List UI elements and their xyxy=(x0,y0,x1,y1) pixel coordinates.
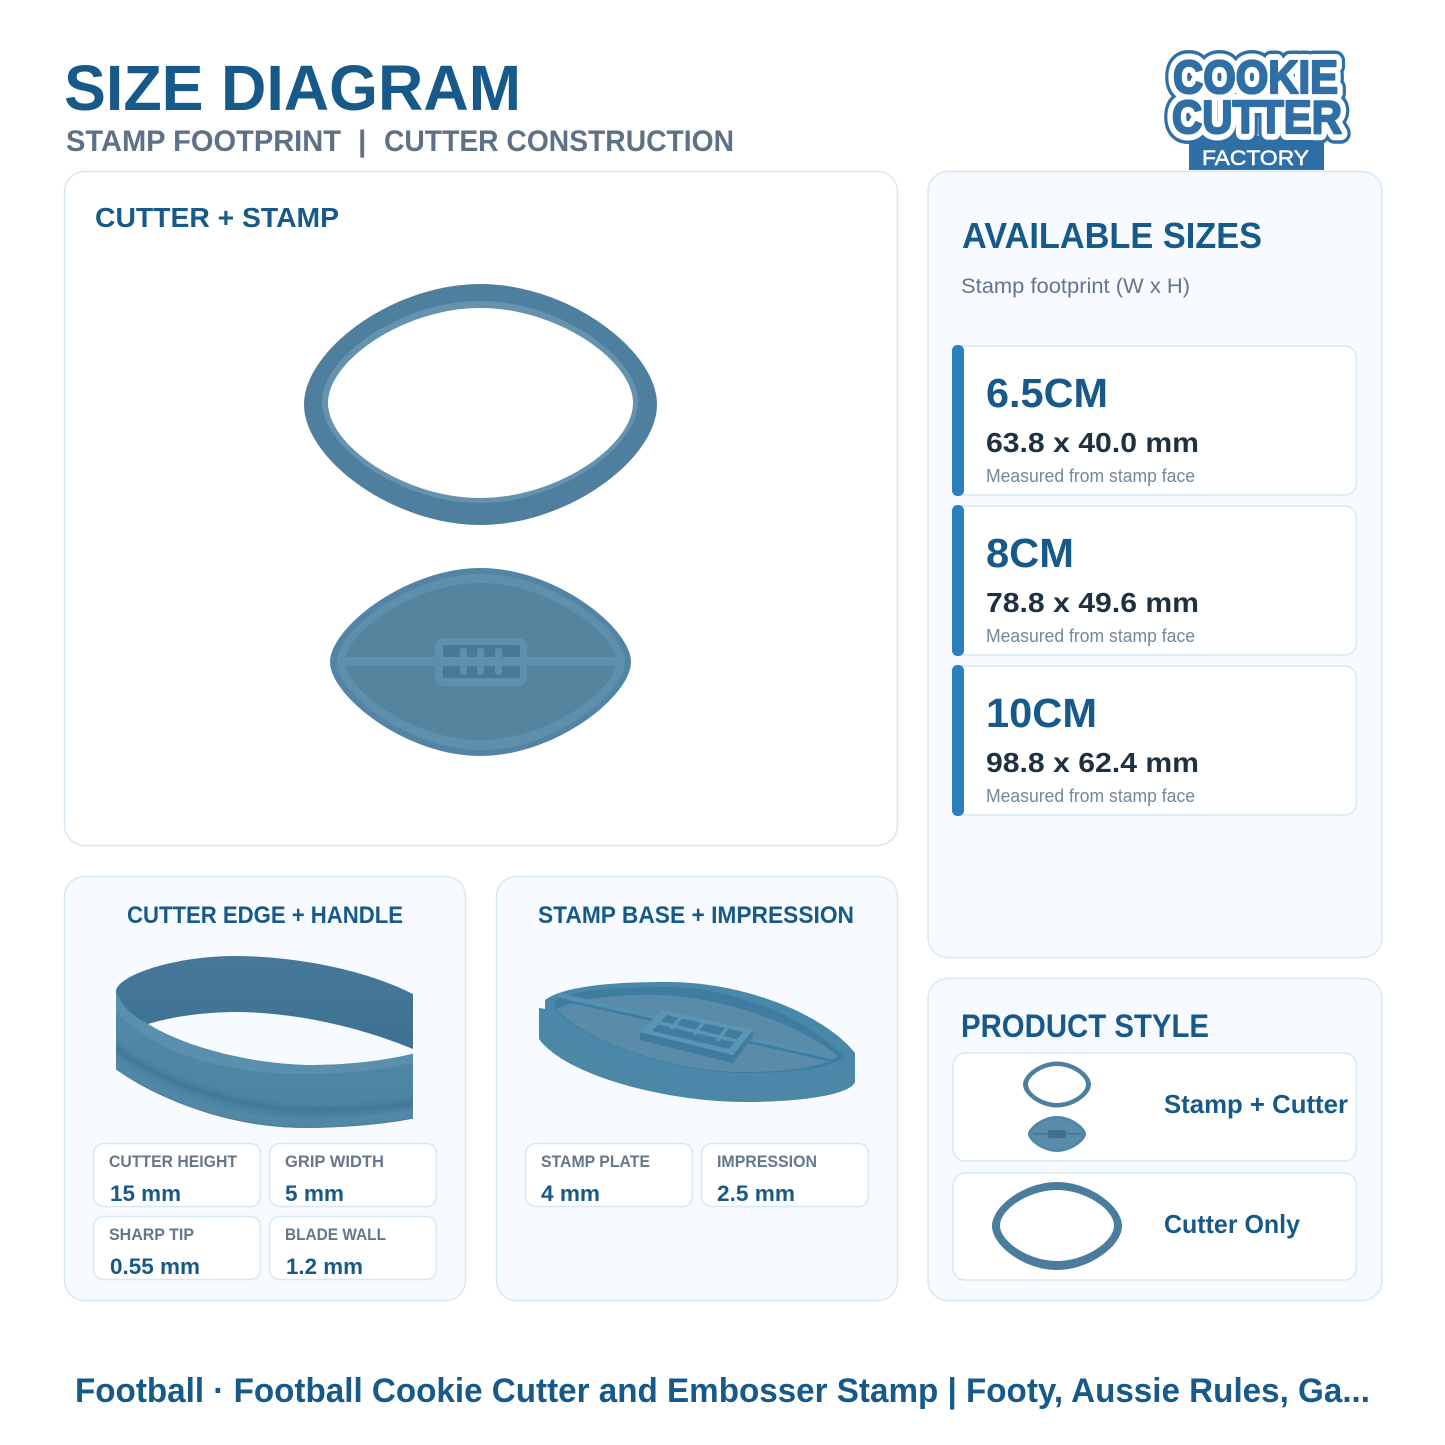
size card: 10cm xyxy=(952,665,1356,816)
panel: cutter + stamp xyxy=(64,172,898,846)
option: stamp + cutter: Stamp + Cutter xyxy=(1164,1089,1348,1119)
spec: grip width: 5 mm xyxy=(285,1181,344,1206)
logo: Cookie Cutter Factory: CUTTER xyxy=(1172,91,1342,143)
size card: 8cm: 78.8 x 49.6 mm xyxy=(986,587,1199,618)
stamp 3D render xyxy=(539,982,855,1102)
logo: Cookie Cutter Factory: COOKIE xyxy=(1173,51,1338,103)
panel: product style xyxy=(928,978,1382,1300)
size card: 8cm xyxy=(952,505,1356,656)
panel: cutter edge + handle xyxy=(64,876,466,1300)
logo: Cookie Cutter Factory xyxy=(1172,51,1342,170)
size card: 6.5cm: Measured from stamp face xyxy=(986,465,1195,486)
spec: grip width xyxy=(270,1144,436,1206)
footer product title: Football · Football Cookie Cutter and Embosser Stamp | Footy, Aussie Rules, Ga... xyxy=(75,1372,1370,1410)
spec: impression: 2.5 mm xyxy=(717,1181,795,1206)
cutter 3D render xyxy=(114,956,420,1128)
subtitle xyxy=(66,125,734,158)
subtitle: CUTTER CONSTRUCTION xyxy=(384,125,734,158)
spec: cutter height: CUTTER HEIGHT xyxy=(109,1152,238,1171)
spec: blade wall: BLADE WALL xyxy=(285,1225,386,1244)
cutter top view xyxy=(304,284,657,525)
logo: Cookie Cutter Factory: CUTTER xyxy=(1172,91,1342,143)
spec: blade wall: 1.2 mm xyxy=(286,1254,363,1279)
spec: impression xyxy=(702,1144,868,1206)
heading: cutter edge + handle: CUTTER EDGE + HANDLE xyxy=(127,902,403,929)
spec: cutter height xyxy=(94,1144,260,1206)
spec: grip width: GRIP WIDTH xyxy=(285,1152,384,1171)
logo: Cookie Cutter Factory: FACTORY xyxy=(1202,147,1309,170)
logo: Cookie Cutter Factory: CUTTER xyxy=(1172,91,1342,143)
heading: stamp base + impression: STAMP BASE + IMPRESSION xyxy=(538,902,854,929)
spec: impression: IMPRESSION xyxy=(717,1152,817,1171)
subtitle: STAMP FOOTPRINT xyxy=(66,125,341,158)
spec: stamp plate: 4 mm xyxy=(541,1181,600,1206)
spec: sharp tip: SHARP TIP xyxy=(109,1225,194,1244)
size card: 10cm: 10CM xyxy=(986,690,1097,736)
option: cutter only: Cutter Only xyxy=(1164,1209,1301,1239)
spec: stamp plate: STAMP PLATE xyxy=(541,1152,650,1171)
size card: 10cm: Measured from stamp face xyxy=(986,785,1195,806)
stamp top view xyxy=(330,568,631,756)
title: SIZE DIAGRAM xyxy=(64,52,521,124)
logo: Cookie Cutter Factory: COOKIE xyxy=(1173,51,1338,103)
spec: sharp tip xyxy=(94,1216,260,1280)
panel: stamp base + impression xyxy=(496,876,898,1300)
size card: 10cm: 98.8 x 62.4 mm xyxy=(986,747,1199,778)
spec: stamp plate xyxy=(526,1144,692,1206)
logo: Cookie Cutter Factory: COOKIE xyxy=(1173,51,1338,103)
subtitle: | xyxy=(358,125,366,158)
heading: available sizes: AVAILABLE SIZES xyxy=(962,215,1262,256)
size card: 6.5cm: 6.5CM xyxy=(986,370,1108,416)
size card: 8cm: Measured from stamp face xyxy=(986,625,1195,646)
size card: 8cm: 8CM xyxy=(986,530,1074,576)
option: cutter only xyxy=(953,1173,1356,1280)
size card: 6.5cm: 63.8 x 40.0 mm xyxy=(986,427,1199,458)
option: stamp + cutter xyxy=(953,1053,1356,1161)
heading: product style: PRODUCT STYLE xyxy=(961,1008,1209,1044)
panel: available sizes xyxy=(928,172,1382,958)
caption: stamp footprint: Stamp footprint (W x H) xyxy=(961,274,1190,298)
spec: cutter height: 15 mm xyxy=(110,1181,181,1206)
spec: sharp tip: 0.55 mm xyxy=(110,1254,200,1279)
spec: blade wall xyxy=(270,1216,436,1280)
heading: cutter + stamp: CUTTER + STAMP xyxy=(95,202,339,233)
size card: 6.5cm xyxy=(952,345,1356,496)
